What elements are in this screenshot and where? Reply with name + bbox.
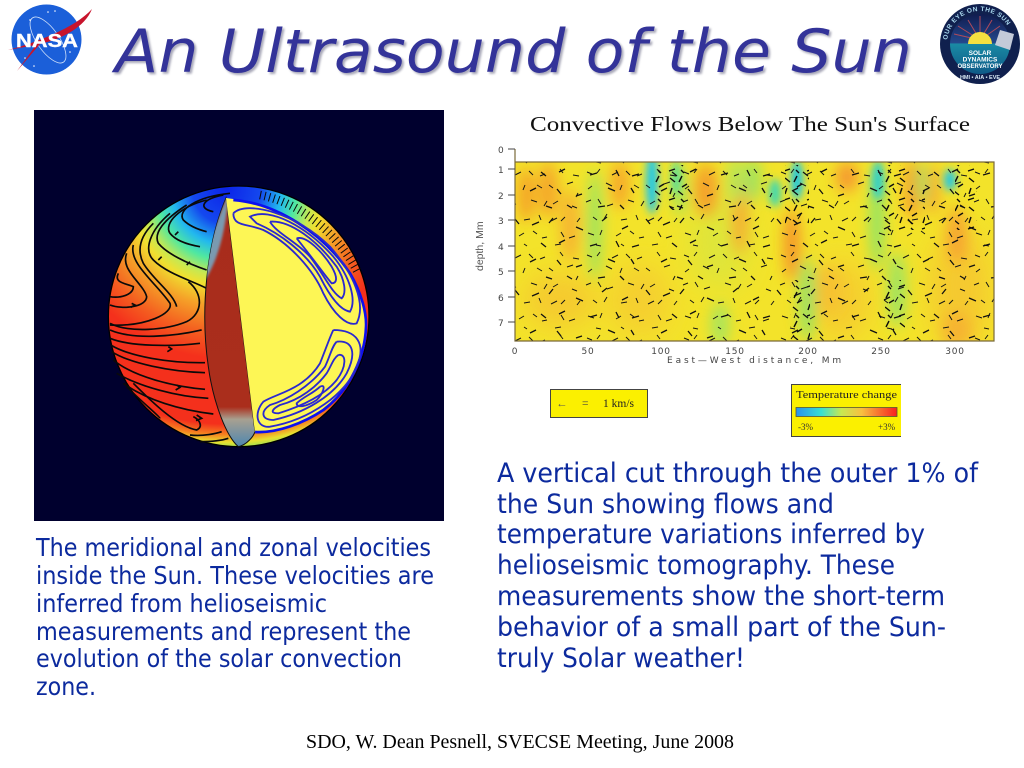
caption: left panel (35, 533, 434, 701)
icon: Solar Dynamics Observatory logo (940, 4, 1020, 84)
velocity arrows (515, 162, 994, 341)
icon: NASA logo: NASA (16, 31, 78, 51)
distance axis: East—West distance, Mm (667, 356, 842, 366)
depth axis: 6 (498, 294, 505, 304)
caption: right panel: temperature variations inferred by (497, 519, 925, 550)
footer credit: SDO, W. Dean Pesnell, SVECSE Meeting, June 2008 (306, 732, 734, 753)
depth axis: depth, Mm (474, 221, 486, 271)
depth axis: 5 (498, 268, 505, 278)
blue meridional streamlines (233, 200, 366, 432)
caption: right panel: behavior of a small part of the Sun- (497, 612, 946, 643)
caption: left panel: The meridional and zonal velocities (35, 533, 431, 562)
distance axis: 200 (798, 347, 818, 357)
depth axis: 3 (498, 217, 505, 227)
chart: convective flows heat map (474, 112, 994, 437)
title: An Ultrasound of the Sun (111, 17, 912, 87)
icon: Solar Dynamics Observatory logo: HMI • AIA • EVE (960, 75, 1000, 81)
legend: temperature change: -3% (798, 422, 813, 432)
chart title: Convective Flows Below The Sun's Surface (530, 112, 970, 136)
caption: left panel: evolution of the solar convection (36, 644, 402, 673)
legend: temperature change: Temperature change (796, 389, 897, 401)
distance axis: 0 (512, 347, 518, 357)
panel: solar interior sphere (34, 110, 444, 521)
depth axis: 0 (498, 146, 505, 156)
heat map field (516, 162, 994, 340)
icon: Solar Dynamics Observatory logo: OUR EYE ON THE SUN (943, 6, 1011, 40)
distance axis: 150 (725, 347, 745, 357)
legend: arrow scale: ← (556, 398, 568, 410)
caption: left panel: inside the Sun. These velocities are (36, 561, 434, 590)
distance axis: 300 (945, 347, 965, 357)
legend: arrow scale (550, 390, 648, 418)
caption: right panel: measurements show the short-term (497, 581, 945, 612)
icon: Solar Dynamics Observatory logo: OBSERVATORY (957, 64, 1003, 70)
caption: right panel: helioseismic tomography. These (497, 550, 895, 581)
distance axis: 50 (581, 347, 595, 357)
legend: temperature change: +3% (878, 422, 896, 432)
caption: left panel: measurements and represent the (36, 617, 411, 646)
depth axis: 4 (498, 243, 505, 253)
yellow meridional plane (226, 198, 366, 433)
caption: left panel: zone. (36, 672, 96, 701)
black surface streamlines (110, 193, 358, 442)
legend: arrow scale: = (582, 398, 588, 410)
distance axis: 100 (651, 347, 671, 357)
distance axis (512, 347, 965, 366)
icon: Solar Dynamics Observatory logo: SOLAR (969, 50, 992, 57)
depth axis (474, 146, 515, 329)
caption: right panel: the Sun showing flows and (497, 489, 834, 520)
icon: NASA logo (8, 4, 92, 74)
cut cross-section crescent (205, 193, 255, 447)
depth axis: 1 (498, 166, 505, 176)
legend: temperature change (791, 384, 901, 437)
legend: arrow scale: 1 km/s (603, 398, 635, 410)
distance axis: 250 (871, 347, 891, 357)
icon: Solar Dynamics Observatory logo: DYNAMICS (963, 56, 998, 64)
caption: right panel: truly Solar weather! (497, 643, 745, 674)
caption: right panel (497, 458, 979, 674)
caption: left panel: inferred from helioseismic (36, 589, 327, 618)
plot frame (515, 149, 994, 341)
caption: right panel: A vertical cut through the outer 1% of (497, 458, 979, 489)
depth axis: 2 (498, 192, 505, 202)
depth axis: 7 (498, 319, 505, 329)
sphere surface (108, 186, 369, 447)
